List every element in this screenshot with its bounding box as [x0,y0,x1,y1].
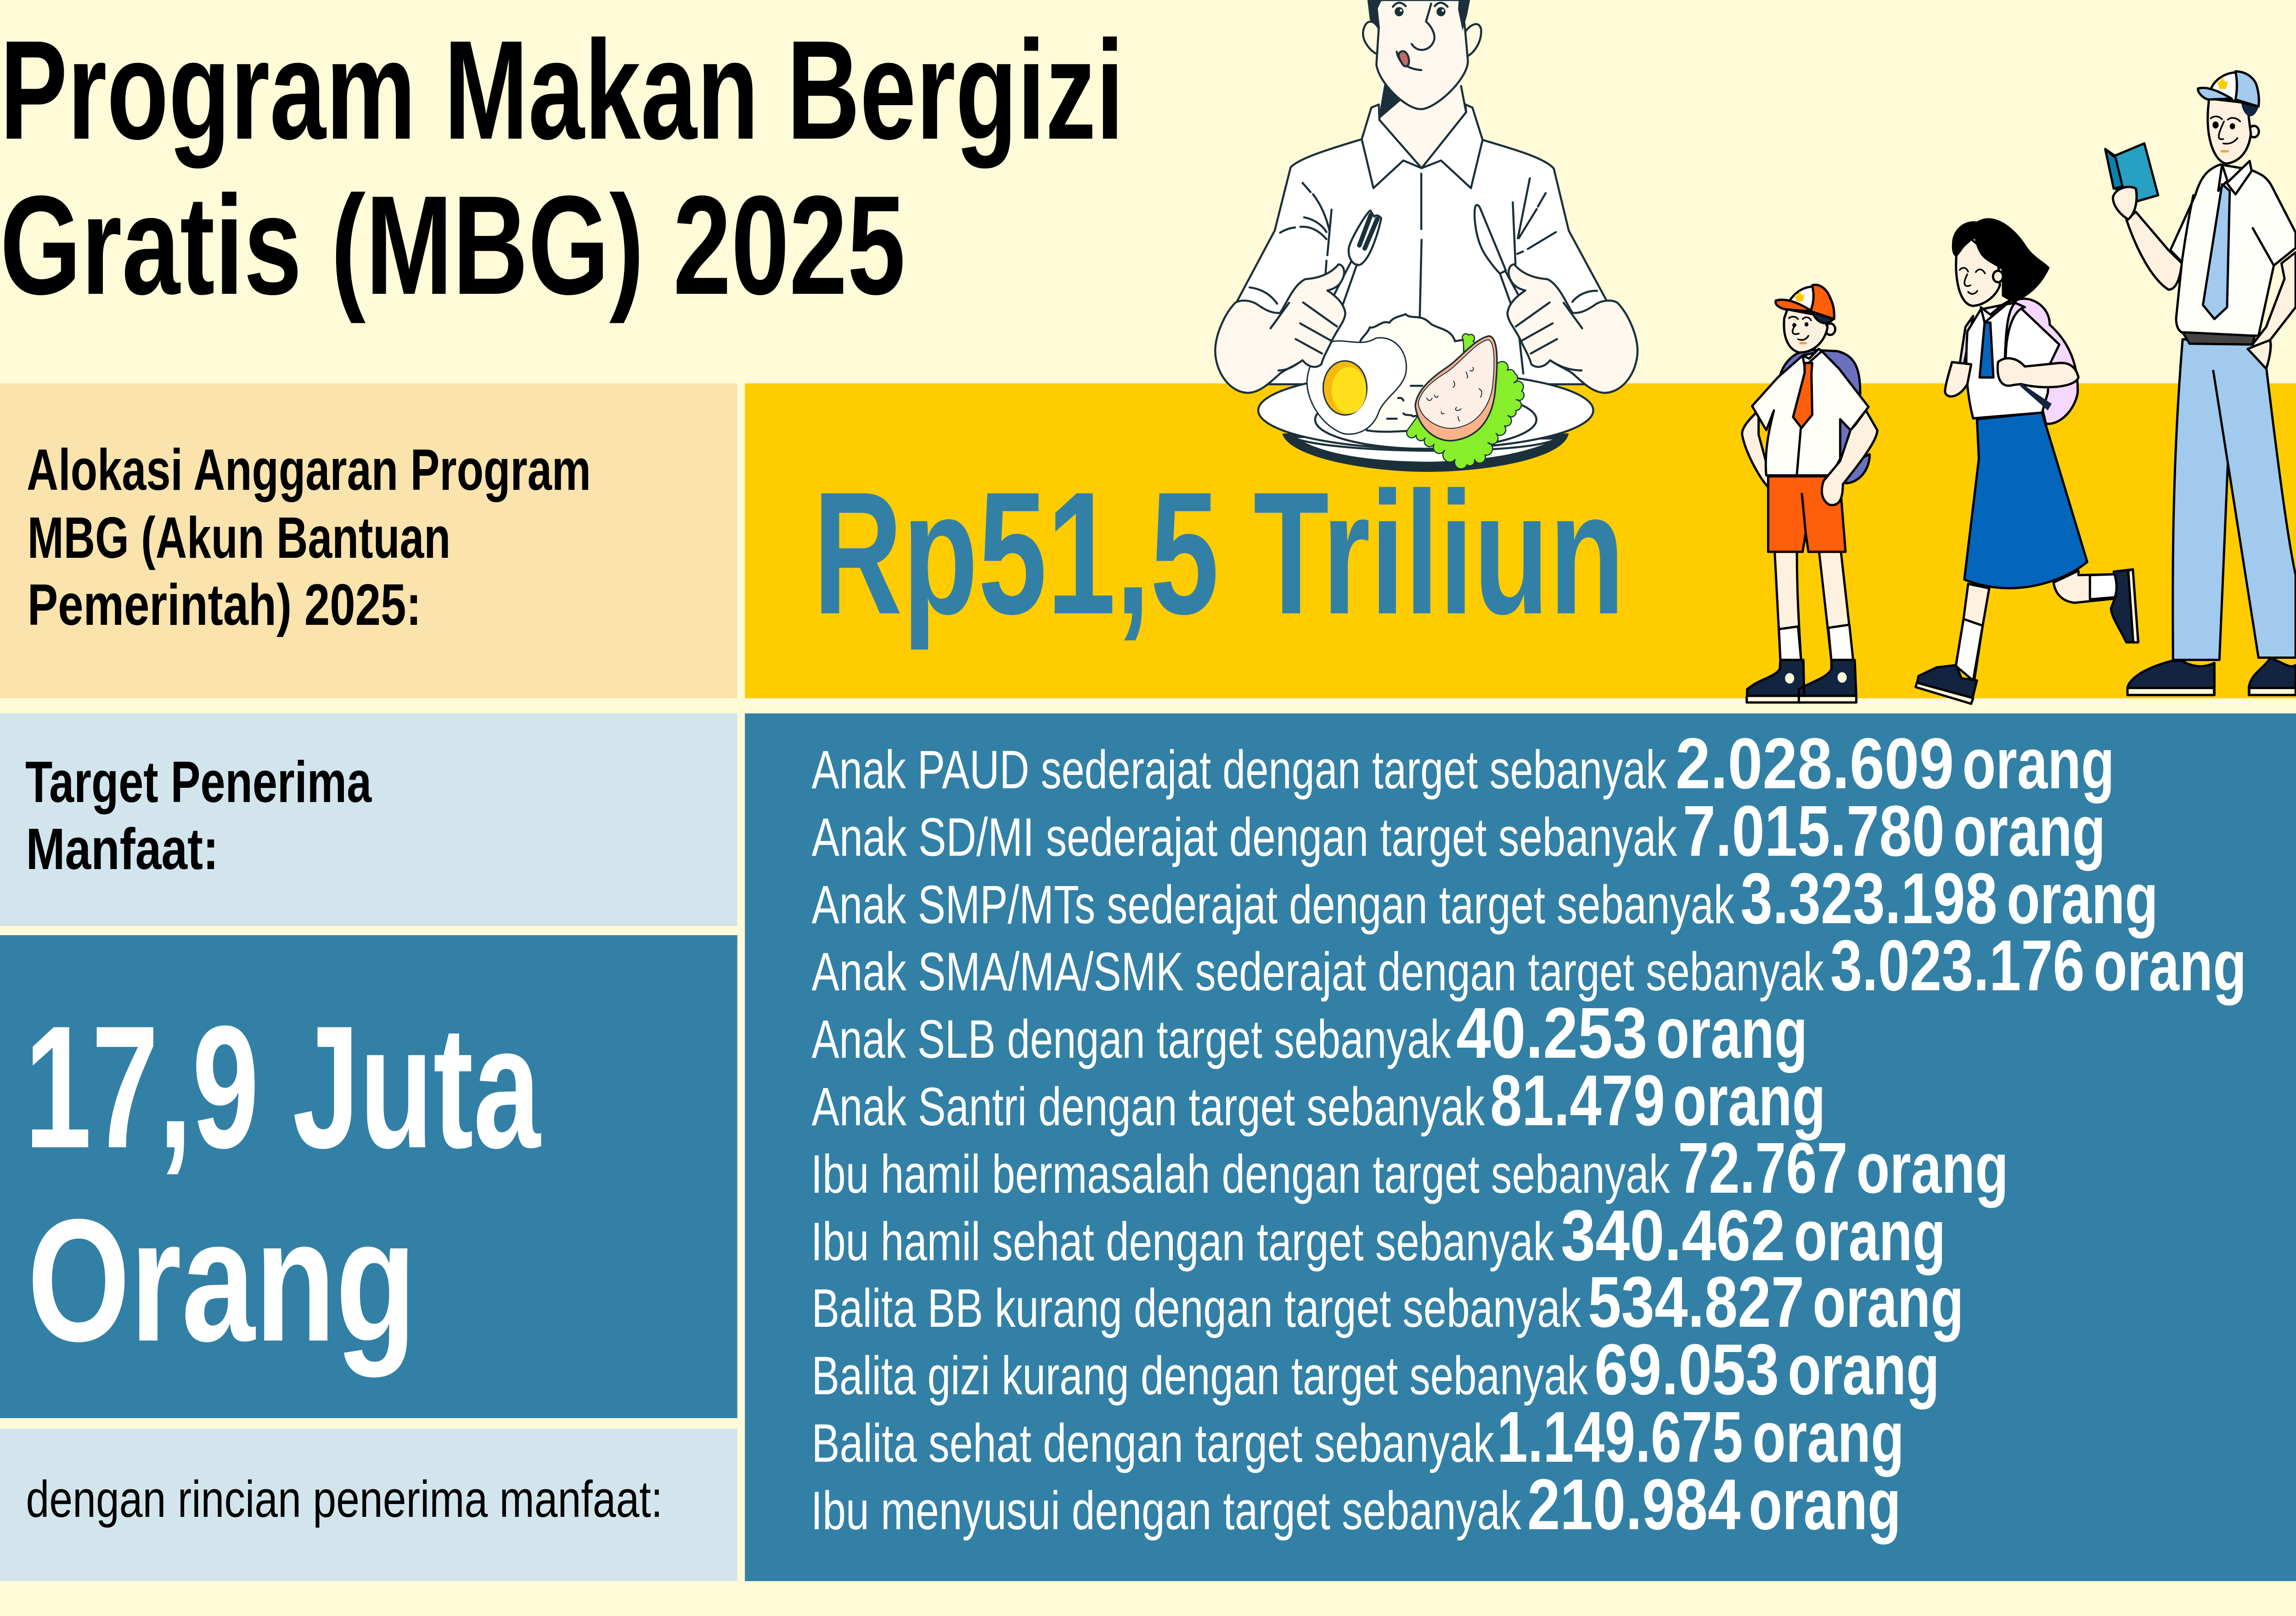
row: Ibu hamil bermasalah: 72.767 [1678,1128,1848,1208]
row: PAUD: orang [1962,723,2115,803]
right arm and hand [1508,264,1638,393]
row: Ibu hamil sehat: 340.462 [1561,1195,1785,1275]
shirt [1235,139,1606,384]
row: Ibu menyusui [811,1464,1901,1544]
panel: target label: Manfaat: [26,817,219,882]
panel: beneficiary breakdown list [745,713,2296,1581]
row: Ibu hamil bermasalah: orang [1856,1128,2009,1208]
row: SD/MI: Anak SD/MI sederajat dengan target sebanyak [811,807,1677,868]
panel: budget label: Pemerintah) 2025: [28,573,422,638]
row: Santri [811,1060,1826,1140]
row: Ibu menyusui: 210.984 [1527,1464,1740,1544]
plate [1258,372,1593,472]
fork [1334,211,1381,304]
fried egg [1307,338,1407,434]
row: Santri: Anak Santri dengan target sebanyak [811,1077,1485,1137]
row: PAUD: Anak PAUD sederajat dengan target sebanyak [811,740,1667,800]
row: Balita BB kurang [811,1262,1964,1342]
row: Balita gizi kurang: 69.053 [1594,1329,1779,1409]
high school boy with book [2105,71,2296,695]
lettuce [1407,334,1524,469]
row: Ibu hamil bermasalah [811,1128,2009,1208]
row: Balita sehat: Balita sehat dengan target sebanyak [811,1413,1495,1474]
title [0,11,1124,325]
row: SD/MI [811,791,2105,871]
panel: details caption: dengan rincian penerima manfaat: [26,1471,663,1528]
row: Ibu hamil sehat [811,1195,1946,1275]
row: SLB: orang [1656,993,1807,1073]
panel: total beneficiaries: 17,9 Juta [24,990,541,1184]
row: Ibu hamil bermasalah: Ibu hamil bermasalah dengan target sebanyak [811,1144,1670,1205]
row: Ibu hamil sehat: Ibu hamil sehat dengan target sebanyak [811,1212,1554,1272]
row: SMA/MA/SMK [811,925,2246,1005]
row: SLB: 40.253 [1456,993,1648,1073]
knife [1474,205,1519,304]
row: Balita gizi kurang [811,1329,1940,1409]
row: PAUD [811,723,2115,803]
panel: target label: Target Penerima [25,750,372,815]
panel: total beneficiaries [0,935,737,1418]
left arm and hand [1215,264,1345,393]
row: SMP/MTs [811,858,2158,938]
sliced meat [1415,336,1497,441]
panel: target label [0,713,737,926]
row: Balita sehat [811,1397,1904,1477]
row: Balita sehat: orang [1752,1397,1904,1477]
row: SMP/MTs: Anak SMP/MTs sederajat dengan target sebanyak [811,875,1735,935]
row: Ibu hamil sehat: orang [1794,1195,1946,1275]
panel: budget label: Alokasi Anggaran Program [27,438,591,503]
panel: budget value [745,383,2296,698]
row: SMP/MTs: 3.323.198 [1740,858,1998,938]
row: SMA/MA/SMK: 3.023.176 [1830,925,2085,1005]
head [1363,0,1481,109]
elementary school boy [1742,285,1877,702]
row: Ibu menyusui: orang [1749,1464,1901,1544]
row: Santri: orang [1673,1060,1826,1140]
row: SLB: Anak SLB dengan target sebanyak [811,1009,1451,1070]
row: SMA/MA/SMK: Anak SMA/MA/SMK sederajat dengan target sebanyak [811,942,1824,1002]
row: Balita BB kurang: 534.827 [1588,1262,1804,1342]
junior high school girl [1916,218,2138,704]
panel: total beneficiaries: Orang [28,1183,416,1379]
row: SD/MI: orang [1953,791,2105,871]
row: SMA/MA/SMK: orang [2093,925,2246,1005]
row: SMP/MTs: orang [2007,858,2158,938]
row: Balita gizi kurang: Balita gizi kurang dengan target sebanyak [811,1346,1588,1406]
panel: budget label: MBG (Akun Bantuan [28,506,450,571]
illustration: three students [1742,71,2296,704]
row: Balita sehat: 1.149.675 [1497,1397,1743,1477]
rice [1358,314,1464,432]
panel: budget value: Rp51,5 Triliun [813,456,1625,651]
title: Gratis (MBG) 2025 [0,167,906,325]
row: SLB [811,993,1807,1073]
title: Program Makan Bergizi [0,11,1124,169]
row: PAUD: 2.028.609 [1676,723,1954,803]
neck and collar [1362,81,1483,188]
row: Balita gizi kurang: orang [1788,1329,1940,1409]
row: Santri: 81.479 [1490,1060,1665,1140]
row: Balita BB kurang: orang [1812,1262,1964,1342]
row: Balita BB kurang: Balita BB kurang dengan target sebanyak [811,1278,1581,1339]
row: Ibu menyusui: Ibu menyusui dengan target sebanyak [811,1481,1521,1541]
illustration: man eating with plate of food [1215,0,1638,472]
row: SD/MI: 7.015.780 [1683,791,1945,871]
panel: budget label [0,383,737,698]
panel: details caption [0,1429,737,1581]
